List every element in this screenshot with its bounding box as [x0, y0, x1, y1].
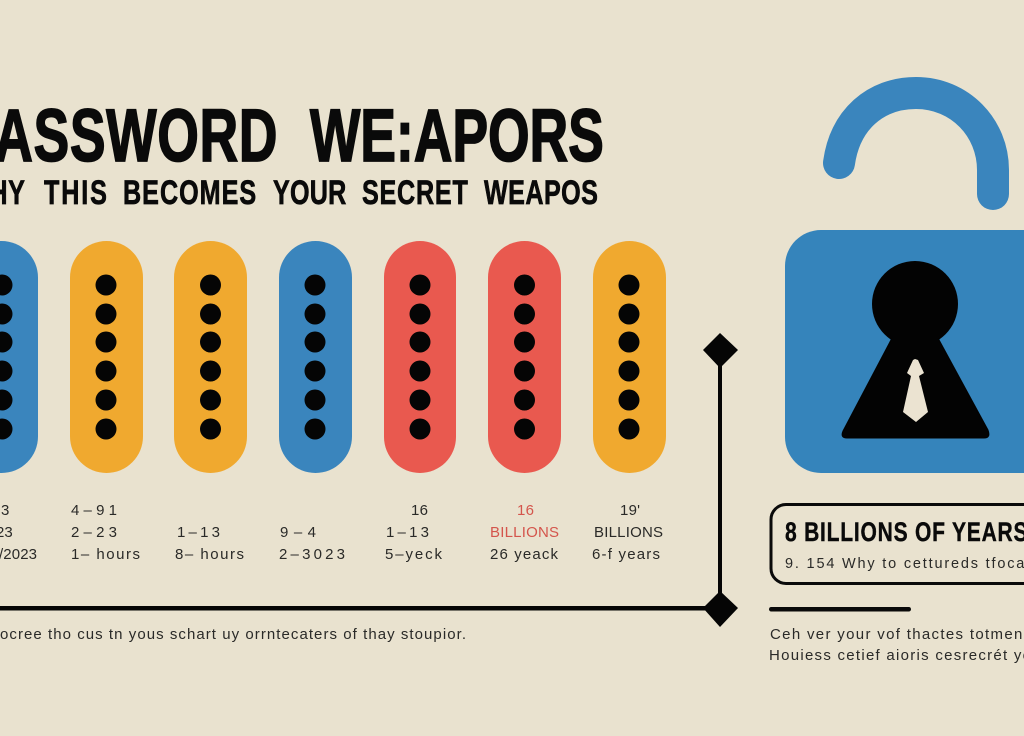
pill 2: orange — [70, 241, 143, 473]
padlock shackle — [839, 93, 993, 194]
icon: open padlock — [785, 93, 1024, 473]
labels under pill 1 — [0, 502, 37, 563]
labels under pill 7: 6-f years — [592, 546, 660, 563]
labels under pill 6: BILLIONS — [490, 524, 559, 541]
necktie in keyhole — [903, 359, 928, 422]
labels under pill 7 — [592, 502, 663, 563]
callout subtext: 9. 154 Why to cettureds tfocar — [785, 556, 1024, 572]
labels under pill 2: 4–91 — [71, 502, 117, 519]
labels under pill 5: 5–yeck — [385, 546, 442, 563]
right caption — [769, 626, 1024, 664]
subtitle: WEAPOS — [484, 174, 598, 212]
labels under pill 3: 8– hours — [175, 546, 244, 563]
labels under pill 4: 9–4 — [280, 524, 316, 541]
labels under pill 6: 16 — [517, 502, 534, 519]
subtitle: YOUR — [273, 174, 346, 212]
labels under pill 2: 2–23 — [71, 524, 117, 541]
subtitle — [0, 174, 598, 212]
subtitle: BECOMES — [123, 174, 256, 212]
bottom caption: ocree tho cus tn yous schart uy orrntecaters of thay stoupior. — [0, 626, 466, 643]
labels under pill 3 — [175, 524, 244, 563]
padlock body — [785, 230, 1024, 473]
labels under pill 7: 19' — [620, 502, 640, 519]
pill 1: blue — [0, 241, 38, 473]
pill 3: orange — [174, 241, 247, 473]
callout box — [771, 504, 1024, 584]
pill 4: blue — [279, 241, 352, 473]
labels under pill 4 — [279, 524, 345, 563]
labels under pill 5: 16 — [411, 502, 428, 519]
keyhole — [842, 261, 989, 438]
labels under pill 1: 3 — [1, 502, 9, 519]
subtitle: SECRET — [362, 174, 468, 212]
labels under pill 1: /2023 — [0, 546, 37, 563]
labels under pill 5 — [385, 502, 442, 563]
pill 6: red — [488, 241, 561, 473]
title: WE:APORS — [310, 94, 604, 177]
labels under pill 6: 26 yeack — [490, 546, 558, 563]
connector line with diamonds — [0, 333, 738, 627]
pill 5: red — [384, 241, 456, 473]
labels under pill 6 — [490, 502, 559, 563]
short divider bar — [769, 607, 911, 612]
labels under pill 4: 2–3023 — [279, 546, 345, 563]
title — [0, 94, 604, 177]
subtitle: THIS — [44, 174, 107, 212]
right caption: Houiess cetief aioris cesrecrét ye — [769, 647, 1024, 664]
labels under pill 5: 1–13 — [386, 524, 429, 541]
labels under pill 7: BILLIONS — [594, 524, 663, 541]
pill 7: orange — [593, 241, 666, 473]
labels under pill 2: 1– hours — [71, 546, 140, 563]
labels under pill 3: 1–13 — [177, 524, 220, 541]
pill row: password characters — [0, 241, 666, 473]
callout heading: 8 BILLIONS OF YEARS — [785, 518, 1024, 548]
labels under pill 2 — [71, 502, 140, 563]
